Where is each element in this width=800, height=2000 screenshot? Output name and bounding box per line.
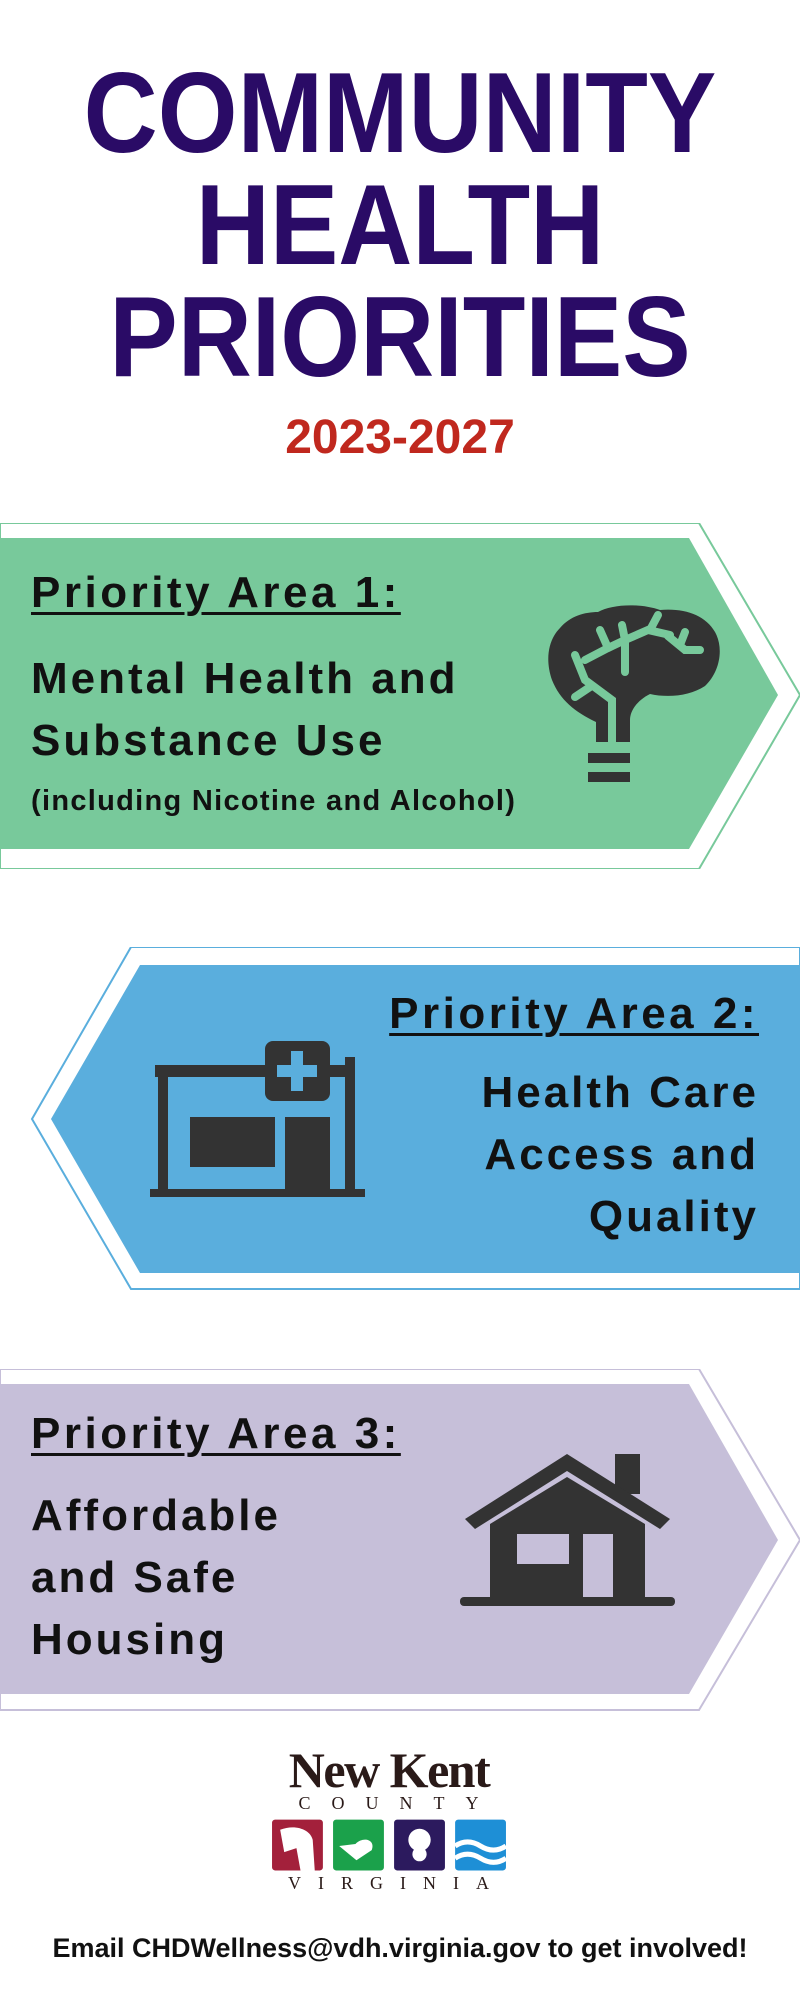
- text block: Affordable: [31, 1491, 281, 1540]
- heading: Priority Area 1:: [31, 568, 401, 617]
- text block: [481, 1068, 759, 1241]
- title: COMMUNITY: [84, 50, 716, 177]
- footer: email call to action: Email CHDWellness@vdh.virginia.gov to get involved!: [53, 1933, 747, 1963]
- year subtitle: 2023-2027: [285, 411, 515, 464]
- heading: Priority Area 2:: [389, 989, 759, 1038]
- panel: priority area 2: [30, 947, 800, 1290]
- icon: house: [460, 1454, 675, 1606]
- title: PRIORITIES: [109, 274, 691, 401]
- text block: Health Care: [481, 1068, 759, 1117]
- logo: New Kent County Virginia: New Kent: [289, 1742, 489, 1798]
- text block: [31, 654, 458, 765]
- text block: Mental Health and: [31, 654, 458, 703]
- logo: New Kent County Virginia: VIRGINIA: [288, 1873, 506, 1893]
- text block: Quality: [589, 1192, 759, 1241]
- text block: Access and: [484, 1130, 759, 1179]
- panel: priority area 1: [0, 523, 800, 869]
- note: (including Nicotine and Alcohol): [31, 785, 516, 817]
- title: [84, 50, 716, 401]
- text block: Housing: [31, 1615, 228, 1664]
- text block: and Safe: [31, 1553, 238, 1602]
- panel: priority area 3: [0, 1369, 800, 1711]
- icon: clinic: [150, 1041, 365, 1197]
- title: HEALTH: [196, 162, 604, 289]
- icon: brain lightbulb: [548, 605, 720, 782]
- logo: New Kent County Virginia: [272, 1742, 506, 1893]
- logo: New Kent County Virginia: COUNTY: [298, 1793, 500, 1813]
- text block: [31, 1491, 281, 1664]
- text block: Substance Use: [31, 716, 385, 765]
- heading: Priority Area 3:: [31, 1409, 401, 1458]
